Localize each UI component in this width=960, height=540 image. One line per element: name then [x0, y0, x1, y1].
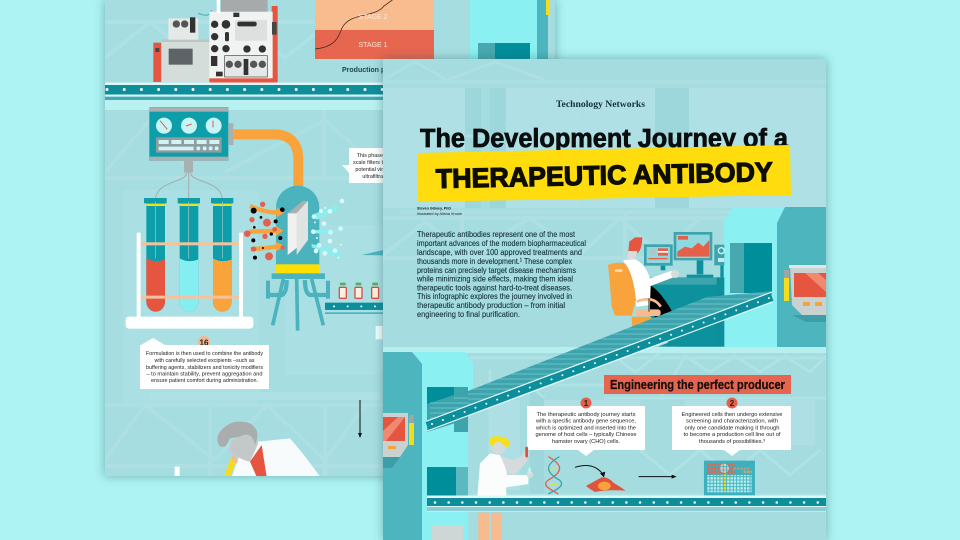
callout: phase filters: ultrafiltra [362, 174, 383, 180]
step 1: hamster ovary (CHO) cells. [552, 439, 620, 445]
panel: back page [105, 0, 555, 477]
chart: production stages: STAGE 2 [358, 14, 388, 21]
byline [417, 206, 462, 216]
step 2: screening and characterization, with [686, 419, 778, 425]
monitors [644, 232, 724, 278]
pipe [233, 134, 298, 188]
callout: phase filters: This phase [357, 153, 383, 159]
step 1: genome of host cells – typically Chinese [536, 432, 636, 438]
well plate [704, 461, 755, 495]
operator [650, 286, 672, 318]
machine: lower left [383, 352, 473, 540]
byline: Steven Gibney, PhD [417, 206, 451, 210]
small conveyor and vials [325, 283, 383, 314]
host cell [586, 477, 626, 492]
heading: engineering [604, 375, 791, 394]
step 16 badge and text [140, 336, 269, 389]
step 16 badge and text: buffering agents, stabilizers and tonicity modifiers [146, 365, 263, 371]
background panels [254, 213, 257, 260]
arrow: down [358, 400, 362, 438]
chart: production stages [315, 0, 434, 59]
step 1: 1 [584, 399, 589, 408]
filter vessel [266, 186, 330, 331]
step 2: only one candidate making it through [684, 425, 780, 431]
callout: phase filters: scale filters t [353, 160, 383, 166]
test tubes [144, 198, 233, 312]
intro text: important advances of the modern biopharmaceutical [417, 238, 586, 248]
conveyor surface [468, 291, 772, 406]
intro text: landscape, with over 100 approved treatments and [417, 247, 582, 257]
scientist bottom [175, 422, 320, 477]
title: The Development Journey of a [420, 125, 789, 153]
heading: engineering: Engineering the perfect producer [610, 377, 785, 392]
operator workstation [608, 232, 724, 347]
callout: phase filters [342, 148, 383, 183]
background structure [383, 88, 826, 208]
intro text: therapeutic tools against hard-to-treat diseases. [417, 282, 572, 292]
conveyor: back top [105, 82, 383, 100]
contaminants [244, 202, 285, 260]
step 2: thousands of possibilities.³ [699, 439, 765, 445]
conveyor: bottom [427, 496, 826, 512]
lower background [470, 353, 826, 500]
step 16 badge and text: with carefully selected excipients –such as [154, 358, 255, 364]
DNA [546, 457, 562, 494]
step 1: The therapeutic antibody journey starts [536, 412, 636, 418]
machine: back right [470, 0, 549, 59]
arrow: gene to cell [575, 466, 605, 477]
step 16 badge and text: ensure patient comfort during administration. [151, 378, 258, 384]
illustration: filtration [126, 107, 383, 339]
step 2 [672, 398, 791, 456]
intro text: This infographic explores the journey involved in [417, 291, 572, 301]
arrow: to screening [639, 475, 677, 479]
machine: purification skid [153, 0, 278, 83]
conveyor: diagonal [427, 292, 772, 431]
intro text: proteins can precisely target disease mechanisms [417, 265, 576, 275]
intro text: while minimizing side effects, making them ideal [416, 274, 573, 284]
chair [608, 263, 661, 328]
step 16 badge and text: Formulation is then used to combine the antibody [146, 351, 263, 357]
step 1: which is optimized and inserted into the [535, 425, 636, 431]
control panel [149, 107, 233, 161]
step 16 badge and text: – to maintain stability, prevent aggregation and [146, 372, 262, 378]
title banner: THERAPEUTIC ANTIBODY [435, 157, 773, 194]
panel: front page [383, 59, 826, 540]
byline: Illustrated by Alisha Vroom [417, 212, 462, 216]
step 2: 2 [730, 399, 735, 408]
intro text: therapeutic antibody production – from initial [417, 300, 565, 310]
step 1: with a specific antibody gene sequence, [535, 419, 636, 425]
step 16 badge and text: 16 [200, 338, 209, 348]
intro text [416, 229, 586, 319]
step 2: to become a production cell line out of [684, 432, 781, 438]
rack [126, 233, 253, 329]
logo: Technology Networks [556, 100, 645, 110]
illustration row [477, 436, 755, 540]
floor band [383, 347, 826, 353]
intro text: Therapeutic antibodies represent one of the most [417, 229, 576, 239]
intro text: engineering to final purification. [417, 309, 520, 319]
machine: upper right [724, 207, 826, 347]
callout: phase filters: potential vir [355, 167, 383, 173]
scientist [477, 436, 533, 540]
title banner [417, 145, 791, 202]
step 1 [527, 398, 645, 456]
chart caption: Production process [342, 67, 408, 74]
chart: production stages: STAGE 1 [358, 42, 388, 49]
orange arrows [249, 206, 282, 249]
intro text: thousands more in development.¹ These complex [417, 256, 573, 266]
step 2: Engineered cells then undergo extensive [682, 412, 782, 418]
filtered droplets [312, 205, 345, 258]
